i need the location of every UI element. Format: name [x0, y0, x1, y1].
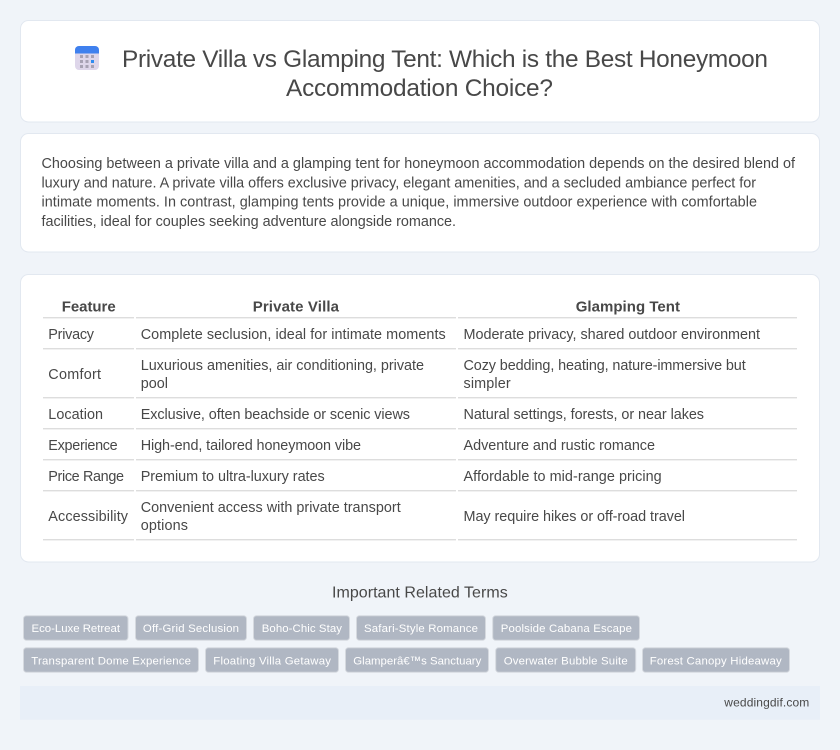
- tag: floating villa getaway: Floating Villa Getaway: [213, 655, 331, 667]
- table header row: Glamping Tent: [576, 299, 680, 316]
- row: accessibility: [48, 500, 685, 534]
- icon: calendar: [75, 46, 99, 70]
- tag: eco-luxe retreat: Eco-Luxe Retreat: [32, 623, 121, 635]
- row: privacy: [48, 327, 760, 343]
- row: location: [48, 407, 704, 423]
- row: comfort: Luxurious amenities, air conditioning, private: [141, 358, 424, 374]
- tag: poolside cabana escape: Poolside Cabana Escape: [501, 623, 632, 635]
- tag: overwater bubble suite: Overwater Bubble Suite: [504, 655, 628, 667]
- table header row: Feature: [62, 299, 116, 316]
- row: privacy: Complete seclusion, ideal for intimate moments: [141, 327, 446, 343]
- tag: eco-luxe retreat: [24, 616, 128, 640]
- tag: glamper's sanctuary: [346, 648, 488, 672]
- tag: boho-chic stay: Boho-Chic Stay: [262, 623, 342, 635]
- tag: transparent dome experience: [24, 648, 198, 672]
- row: comfort: pool: [141, 376, 168, 392]
- footer: weddingdif.com: [723, 696, 809, 710]
- row: accessibility: Accessibility: [48, 509, 129, 525]
- panel: introduction paragraph: luxury and nature. A private villa offers exclusive privacy, elegant amenities, and a secluded ambiance perfect for: [42, 175, 756, 191]
- title: Accommodation Choice?: [286, 75, 553, 102]
- tag: glamper's sanctuary: Glamperâ€™s Sanctuary: [353, 655, 482, 667]
- tag: off-grid seclusion: Off-Grid Seclusion: [143, 623, 239, 635]
- tag: floating villa getaway: [206, 648, 338, 672]
- row: price range: [48, 469, 662, 485]
- row: experience: [48, 438, 655, 454]
- row: privacy: Moderate privacy, shared outdoor environment: [464, 327, 760, 343]
- heading: important related terms: Important Related Terms: [332, 585, 508, 602]
- row: comfort: Cozy bedding, heating, nature-immersive but: [464, 358, 746, 374]
- row: privacy: Privacy: [48, 327, 95, 343]
- panel: title header: [20, 20, 820, 122]
- panel: introduction paragraph: facilities, ideal for couples seeking adventure alongside romance.: [42, 214, 456, 230]
- title: Private Villa vs Glamping Tent: Which is the Best Honeymoon: [122, 46, 768, 73]
- row: accessibility: May require hikes or off-road travel: [464, 509, 685, 525]
- footer: [20, 686, 820, 720]
- tag: overwater bubble suite: [496, 648, 636, 672]
- tag: forest canopy hideaway: Forest Canopy Hideaway: [650, 655, 782, 667]
- row: comfort: [48, 358, 746, 392]
- tag: safari-style romance: [356, 616, 486, 640]
- panel: introduction paragraph: intimate moments. In contrast, glamping tents provide a unique, immersive outdoor experience with comfortable: [42, 195, 757, 211]
- row: location: Exclusive, often beachside or scenic views: [141, 407, 410, 423]
- panel: introduction paragraph: Choosing between a private villa and a glamping tent for honeymoon accommodation depends on the desired blend of: [42, 156, 796, 172]
- row: experience: Adventure and rustic romance: [464, 438, 655, 454]
- row: price range: Premium to ultra-luxury rates: [141, 469, 325, 485]
- title: [122, 46, 768, 102]
- table header row: Private Villa: [253, 299, 340, 316]
- row: comfort: Comfort: [48, 367, 101, 383]
- tag: transparent dome experience: Transparent Dome Experience: [31, 655, 191, 667]
- panel: comparison table: [20, 274, 820, 562]
- tag: poolside cabana escape: [493, 616, 640, 640]
- row: price range: Price Range: [48, 469, 124, 485]
- row: experience: High-end, tailored honeymoon vibe: [141, 438, 361, 454]
- row: comfort: simpler: [464, 376, 511, 392]
- row: experience: Experience: [48, 438, 118, 454]
- row: location: Location: [48, 407, 103, 423]
- row: accessibility: options: [141, 518, 188, 534]
- panel: introduction paragraph: [20, 134, 820, 252]
- tag: safari-style romance: Safari-Style Romance: [364, 623, 478, 635]
- row: accessibility: Convenient access with private transport: [141, 500, 401, 516]
- tag: boho-chic stay: [254, 616, 350, 640]
- panel: related term tags: [24, 616, 790, 672]
- tag: off-grid seclusion: [136, 616, 246, 640]
- table header row: [62, 299, 680, 316]
- row: price range: Affordable to mid-range pricing: [464, 469, 662, 485]
- tag: forest canopy hideaway: [642, 648, 790, 672]
- row: location: Natural settings, forests, or near lakes: [464, 407, 704, 423]
